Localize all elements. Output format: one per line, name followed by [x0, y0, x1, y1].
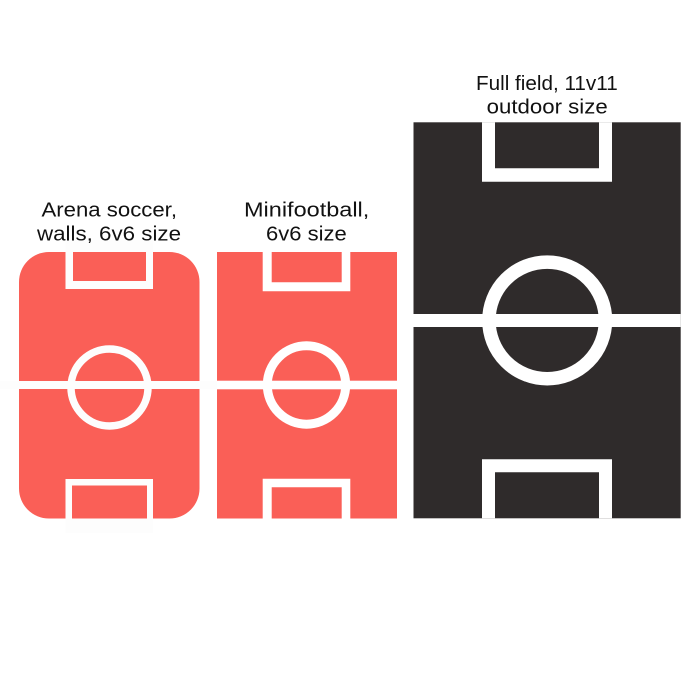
label: minifootball: Minifootball, [244, 200, 369, 222]
centre circle [71, 349, 148, 426]
top penalty box [66, 240, 153, 289]
label: arena soccer: Arena soccer, [42, 200, 177, 222]
label: full field [476, 73, 618, 118]
top penalty box [482, 122, 612, 182]
field surface: arena with rounded corners [19, 252, 200, 518]
halfway line [0, 381, 217, 389]
centre circle [489, 262, 606, 379]
label: minifootball [244, 200, 369, 246]
field surface: full 11v11 [414, 122, 681, 518]
halfway line [217, 381, 397, 389]
label: minifootball: 6v6 size [266, 224, 347, 246]
label: full field: Full field, 11v11 [476, 73, 618, 95]
bottom penalty box [482, 459, 612, 518]
panel: minifootball field [217, 200, 397, 518]
centre circle [267, 346, 346, 424]
label: full field: outdoor size [487, 96, 608, 118]
label: arena soccer [36, 200, 181, 246]
field surface: minifootball [217, 252, 397, 518]
halfway line [414, 314, 681, 327]
label: arena soccer: walls, 6v6 size [36, 224, 181, 246]
bottom penalty box [66, 479, 153, 533]
top penalty box [263, 252, 350, 291]
bottom penalty box [263, 479, 350, 518]
panel: arena soccer field [0, 200, 217, 533]
panel: full field [414, 73, 681, 518]
